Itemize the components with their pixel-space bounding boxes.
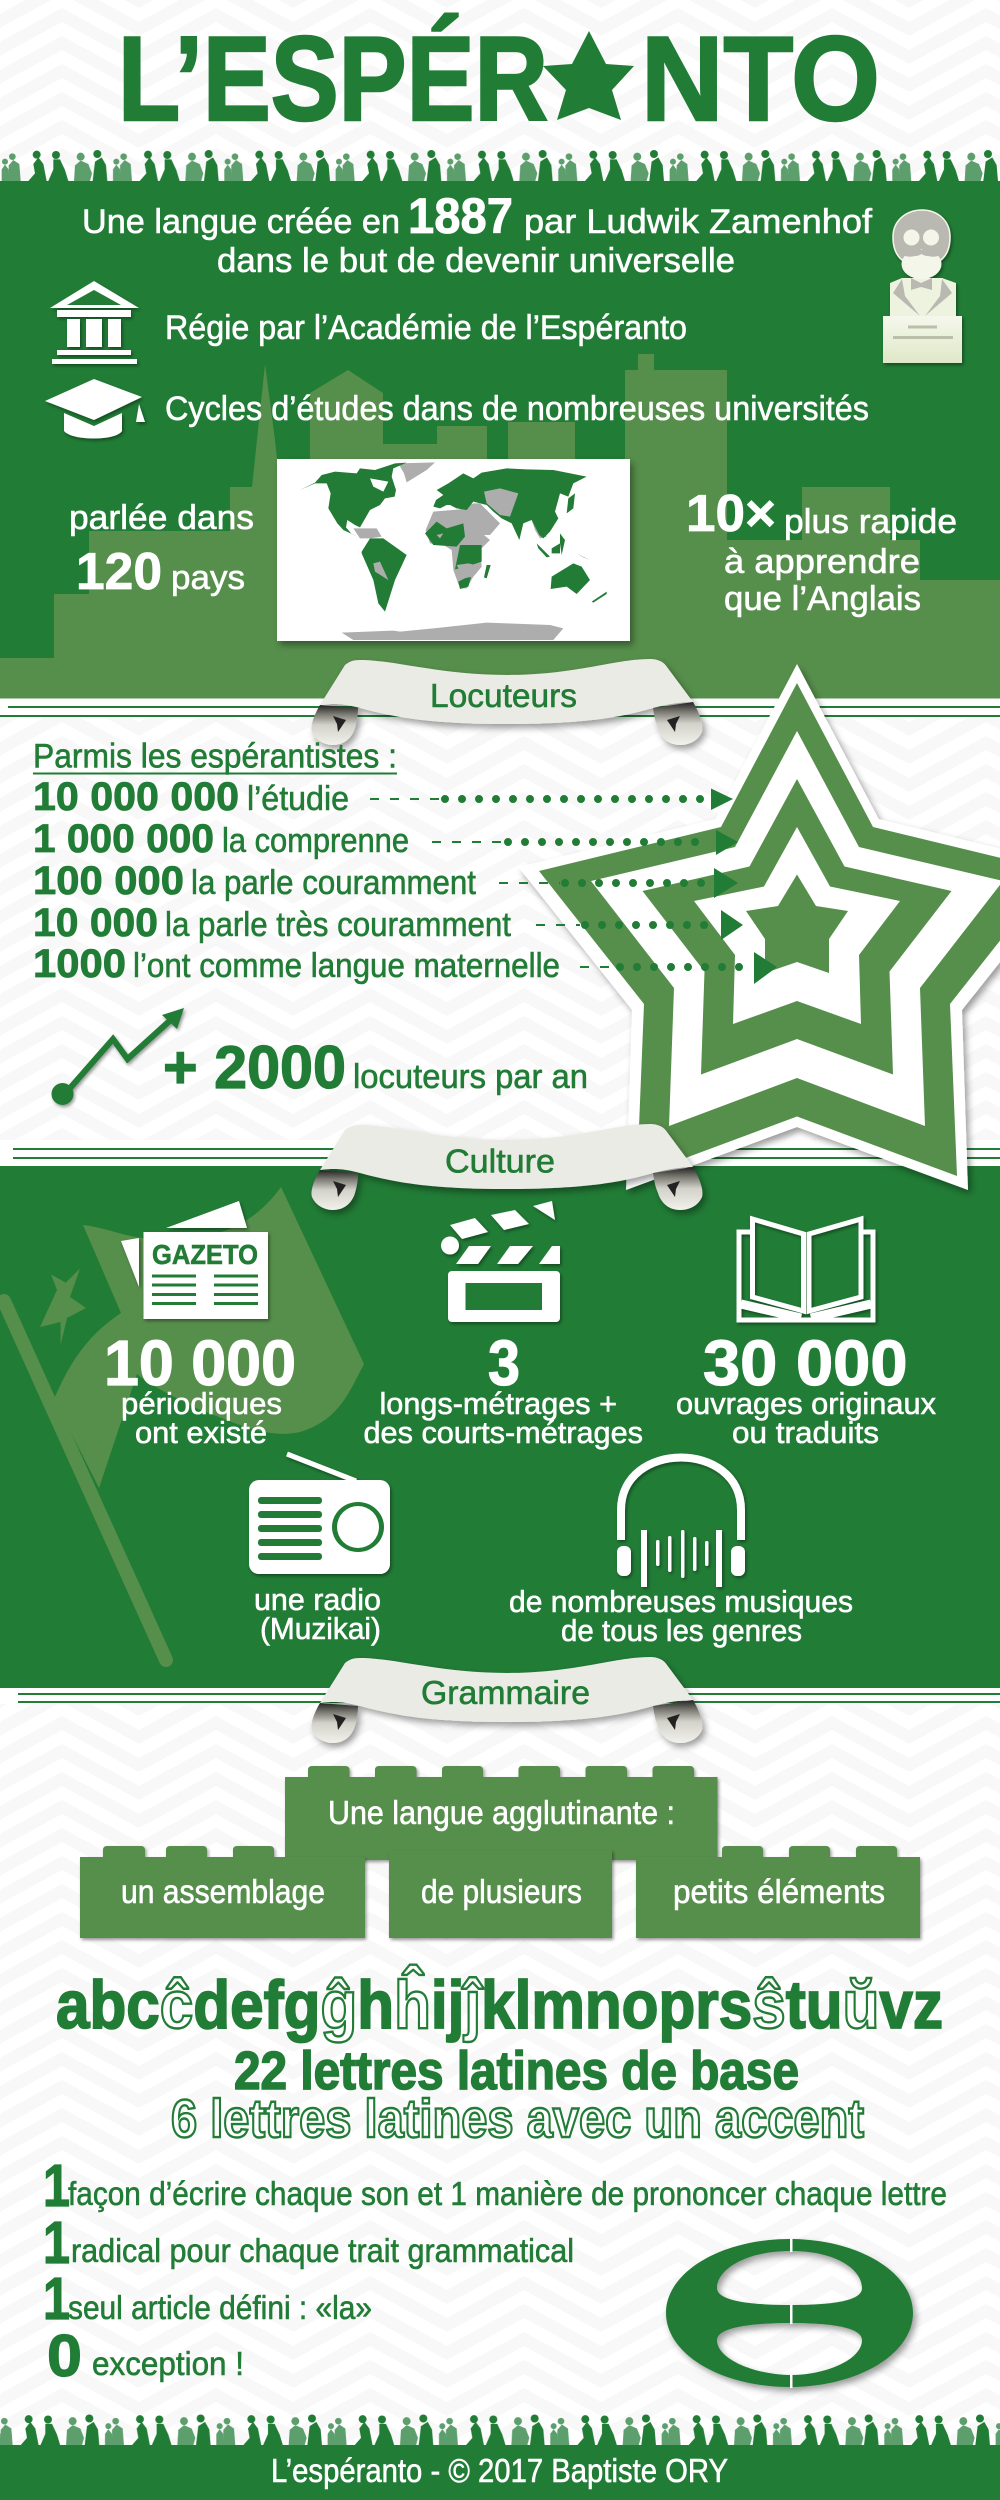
10x faster: plus rapide [784,503,957,541]
academy text: Régie par l’Académie de l’Espéranto [165,309,687,347]
spoken in 120 countries: pays [171,559,245,597]
flag watermark [4,1187,364,1660]
speakers row 1 [33,775,349,819]
universities text: Cycles d’études dans de nombreuses universités [165,390,869,428]
rule 3: 1 [43,2266,70,2332]
bricks [80,1766,920,1938]
brick: right [636,1846,920,1938]
icon: clapperboard [441,1201,560,1322]
speakers row 4 [33,901,512,945]
scroll: Locuteurs [311,659,703,745]
speakers row 4: 10 000 [33,901,158,945]
city skyline [0,354,1000,698]
brick: top [285,1766,718,1860]
speakers per year: locuteurs par an [353,1058,588,1096]
scroll: Culture: Culture [445,1142,555,1180]
footer: L’espéranto - © 2017 Baptiste ORY [271,2452,728,2489]
world map [277,459,630,641]
icon: growth arrow [52,1008,184,1105]
icon: graduation cap [45,379,145,438]
speakers row 3: la parle couramment [191,864,477,902]
speakers row 5: 1000 [33,942,126,986]
music caption [509,1584,853,1648]
alphabet: abcĉdefgĝhĥijĵklmnoprsŝtuŭvz [56,1963,943,2043]
speakers row 1: l’étudie [247,780,349,818]
icon: title star [543,31,634,120]
stat: periodicals: 10 000 [104,1327,296,1399]
scroll: Grammaire [311,1657,703,1743]
speakers row 2: 1 000 000 [33,817,214,861]
rule 2 [43,2210,574,2276]
speakers per year: + 2000 [163,1034,346,1101]
icon: Zamenhof bust [883,210,962,363]
big concentric star [518,664,1000,1190]
speakers per year [163,1034,588,1101]
icon: newspaper: GAZETO [152,1239,258,1270]
title [118,12,880,146]
brick: right: petits éléments [673,1873,885,1910]
speakers row 2 [33,817,409,861]
10x faster: 10× [686,485,776,543]
6 accented letters: 6 lettres latines avec un accent [171,2089,864,2149]
intro text: Une langue créée en [82,203,400,241]
crowd silhouettes top [0,145,1000,181]
list: language rules [43,2153,947,2389]
rule 3: seul article défini : «la» [68,2289,372,2326]
brick: left [80,1846,365,1938]
speakers row 1: 10 000 000 [33,775,239,819]
brick: left: un assemblage [121,1873,325,1910]
stat: films: longs-métrages + [380,1386,617,1421]
stat: periodicals: périodiques [121,1386,282,1421]
footer [0,2445,1000,2500]
rule 4: 0 [47,2323,82,2389]
rule 2: 1 [43,2210,70,2276]
brick: middle: de plusieurs [421,1873,582,1910]
intro text: dans le but de devenir universelle [217,242,735,280]
speakers row 4: la parle très couramment [165,906,512,944]
scroll: Grammaire: Grammaire [421,1674,590,1711]
stat: periodicals [104,1327,296,1450]
radio caption: (Muzikai) [260,1611,381,1646]
rule 2: radical pour chaque trait grammatical [71,2232,574,2269]
10x faster: à apprendre [724,543,920,581]
arrow 2 [432,830,738,855]
icon: academy building [50,281,139,364]
stat: books: ou traduits [732,1415,879,1450]
spoken in 120 countries: 120 [76,543,162,601]
panel: culture background [0,1166,1000,1688]
stat: books: ouvrages originaux [676,1386,936,1421]
music caption: de tous les genres [561,1613,802,1648]
title: NTO [641,12,880,146]
stat: books [676,1327,936,1450]
scroll: Locuteurs: Locuteurs [430,677,577,714]
rule 1: 1 [43,2153,70,2219]
10x faster [686,485,957,618]
stat: films: des courts-métrages [364,1415,643,1450]
brick: middle [389,1850,612,1938]
intro text: par Ludwik Zamenhof [524,203,873,241]
speakers row 5 [33,942,560,986]
music caption: de nombreuses musiques [509,1584,853,1619]
heading: among esperantists: Parmis les espérantistes : [33,738,397,776]
rule 4: exception ! [92,2345,244,2382]
radio caption [254,1582,381,1646]
crowd silhouettes bottom [0,2410,1000,2446]
arrow 3 [499,868,738,898]
arrow 1 [370,788,733,810]
stat: books: 30 000 [703,1327,908,1399]
speakers row 5: l’ont comme langue maternelle [133,947,560,985]
icon: newspaper [121,1201,268,1319]
rule 1 [43,2153,947,2219]
radio caption: une radio [254,1582,381,1617]
stat: periodicals: ont existé [135,1415,267,1450]
22 base letters: 22 lettres latines de base [234,2041,799,2101]
panel: introduction [0,181,1000,698]
icon: Jubilee symbol [666,2238,913,2388]
scroll: Culture [311,1124,703,1210]
10x faster: que l’Anglais [724,580,921,618]
arrow 5 [580,952,777,984]
brick: top: Une langue agglutinante : [328,1794,675,1831]
icon: open book [739,1219,873,1320]
intro text [82,188,873,280]
icon: headphones [617,1458,745,1587]
title: L’ESPÉR [118,12,548,146]
rule 3 [43,2266,372,2332]
speakers row 3: 100 000 [33,859,184,903]
speakers row 2: la comprenne [222,822,409,860]
spoken in 120 countries: parlée dans [69,499,254,537]
stat: films [364,1327,643,1450]
icon: radio [249,1454,390,1574]
arrow 4 [536,910,743,940]
speakers row 3 [33,859,477,903]
intro text: 1887 [408,188,513,244]
stat: films: 3 [488,1327,520,1399]
rule 4 [47,2323,244,2389]
panel: speakers text [33,738,560,986]
spoken in 120 countries [69,499,254,601]
